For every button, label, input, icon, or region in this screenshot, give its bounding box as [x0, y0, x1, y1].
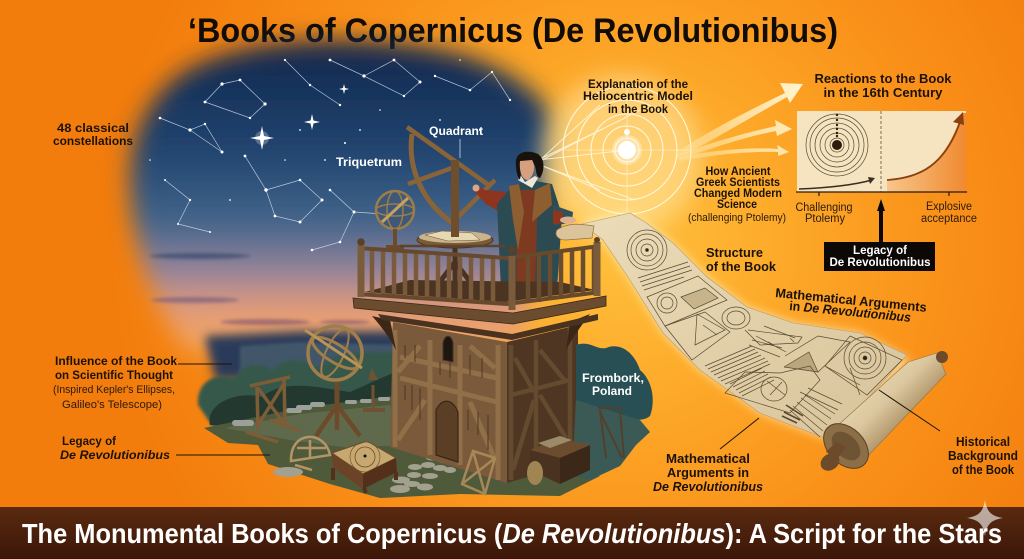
sun [618, 141, 636, 159]
lower arrow [679, 145, 789, 161]
quadrant post [451, 160, 459, 237]
ground [204, 395, 600, 498]
leaning square frame [462, 451, 495, 494]
axis [796, 192, 967, 196]
hand on instrument [472, 184, 480, 192]
tower [372, 314, 598, 483]
stars [149, 59, 511, 251]
leader line: legacy [176, 454, 270, 456]
label: historical background: Historical [956, 435, 1010, 449]
square astrolabe table [332, 441, 397, 493]
tower right timber frame [511, 328, 570, 480]
tower door [436, 401, 458, 462]
trees [576, 344, 653, 420]
balcony floor shadow [365, 280, 595, 302]
quadrant beams [407, 127, 495, 218]
middle arrow [677, 120, 792, 160]
ground right [572, 400, 650, 480]
label: Frombork [582, 371, 644, 398]
chart: reactions to the book [796, 111, 967, 196]
label: mathematical arguments on scroll top: in De Revolutionibus [789, 298, 912, 325]
stone path [273, 456, 456, 493]
tower right face [507, 325, 578, 483]
label: how ancient greek scientists: (challenging Ptolemy) [688, 212, 786, 224]
chart x-axis label: challenging Ptolemy: Challenging [796, 202, 852, 214]
dashed divider [880, 111, 882, 192]
scroll sheet [582, 213, 907, 440]
large armillary sphere [305, 326, 362, 436]
explosive acceptance area [887, 113, 966, 192]
legacy callout box: Legacy of [853, 243, 908, 257]
scroll roller cylinder [826, 353, 946, 458]
corner posts [361, 242, 597, 310]
table legs [432, 245, 478, 292]
balusters left [372, 249, 493, 302]
scroll diagrams [627, 230, 902, 437]
night sky panel [130, 41, 552, 352]
label: explanation of heliocentric model: Heliocentric Model [583, 91, 693, 103]
title: ‘Books of Copernicus (De Revolutionibus) [188, 12, 838, 50]
balcony deck [353, 296, 606, 324]
orbit diagram [806, 114, 868, 176]
hair [516, 152, 544, 180]
red sleeve [553, 210, 563, 224]
label: legacy left [60, 434, 170, 462]
fur collar [509, 183, 552, 250]
label: how ancient greek scientists: Greek Scientists [696, 177, 780, 189]
white collar [518, 176, 538, 188]
bright stars [250, 84, 349, 150]
stone wall [232, 397, 390, 426]
label: structure of the book [706, 245, 777, 274]
leader line: historical background [879, 390, 940, 431]
reaction arrows [675, 83, 803, 161]
label: Triquetrum: Triquetrum [336, 155, 402, 169]
label: influence of the book [53, 354, 177, 411]
label: explanation of heliocentric model: in the Book [608, 104, 669, 116]
label: how ancient greek scientists: Changed Modern [694, 188, 782, 200]
label: mathematical arguments on scroll top: Mathematical Arguments [775, 285, 927, 315]
glow [542, 75, 702, 235]
label: Frombork: Poland [592, 384, 632, 398]
label: how ancient greek scientists: How Ancient [706, 166, 771, 178]
balusters right [528, 247, 594, 303]
label: mathematical arguments lower [653, 452, 763, 494]
bottom banner [0, 500, 1024, 559]
label: historical background: of the Book [952, 463, 1014, 477]
tower timber frame [395, 330, 498, 480]
legacy callout box: De Revolutionibus [830, 255, 931, 269]
wooden chest [530, 436, 590, 484]
label: influence of the book: Influence of the Book [55, 354, 177, 368]
distant hills [205, 331, 400, 380]
label: reactions heading [814, 71, 952, 100]
sparkle mark [967, 500, 1003, 536]
support brackets [372, 314, 590, 350]
tower plank texture [405, 345, 488, 450]
red tunic [516, 190, 538, 290]
half-circle protractor [291, 437, 330, 470]
tree line [198, 352, 398, 430]
wooden cross frame [246, 377, 300, 442]
round table [417, 232, 493, 248]
light rays from head to heliocentric model [538, 75, 702, 235]
tower left face [390, 322, 507, 483]
label: Quadrant: Quadrant [429, 124, 483, 138]
label: historical background: Background [948, 449, 1018, 463]
rolled scroll end [556, 224, 594, 240]
chart x-axis label: explosive: Explosive [926, 201, 972, 213]
parchment scroll [580, 213, 948, 477]
label: constellations: constellations [53, 134, 133, 148]
quadrant and table [407, 127, 495, 292]
chart x-axis label: Ptolemy: Ptolemy [805, 213, 845, 225]
bracket beam [378, 314, 598, 340]
dusk clouds [150, 253, 370, 325]
tower window [443, 336, 453, 362]
early slow curve arrow [799, 180, 872, 189]
label: mathematical arguments lower: Mathematical [666, 452, 750, 466]
banner strip [0, 507, 1024, 559]
upper arrow [675, 83, 803, 158]
back rail [400, 245, 505, 247]
near arm [553, 205, 573, 226]
label: historical background [948, 435, 1018, 477]
constellations [160, 60, 510, 250]
face [520, 160, 534, 180]
far arm sleeve [473, 186, 507, 212]
label: mathematical arguments lower: Arguments in [667, 466, 749, 480]
leader line: influence [178, 363, 232, 365]
sky gradient [130, 41, 552, 352]
heliocentric orbits [563, 86, 691, 214]
legacy callout box [824, 242, 935, 271]
balcony [353, 237, 606, 324]
roller upper knob [936, 351, 948, 363]
converging rays [538, 105, 640, 200]
scroll glow [580, 213, 910, 440]
growth curve [887, 122, 960, 180]
label: mathematical arguments lower: De Revolutionibus [653, 480, 763, 494]
chart x-axis label: acceptance: acceptance [921, 213, 977, 225]
round disc [527, 461, 543, 485]
small sundial pedestal [363, 368, 385, 412]
roller end cap [815, 415, 877, 477]
leader line: mathematical arguments [720, 418, 759, 449]
label: influence of the book: on Scientific Thought [55, 368, 173, 382]
cloak [497, 180, 562, 290]
label: reactions heading: Reactions to the Book [814, 71, 952, 86]
label: structure of the book: Structure [706, 245, 763, 260]
label: structure of the book: of the Book [706, 259, 777, 274]
label: how ancient greek scientists [688, 166, 786, 224]
left landscape [198, 326, 600, 498]
pointer line [459, 139, 461, 158]
small tripod [598, 408, 624, 458]
open book on table [425, 231, 480, 241]
label: reactions heading: in the 16th Century [824, 85, 943, 100]
label: explanation of heliocentric model [583, 79, 693, 116]
sun and planets [832, 114, 842, 150]
black arrow to chart [877, 199, 885, 243]
label: 48 classical constellations: 48 classical [57, 121, 129, 135]
post finials [357, 237, 600, 254]
label: influence of the book: (Inspired Kepler's Ellipses, [53, 384, 175, 396]
label: how ancient greek scientists: Science [717, 199, 757, 211]
right trees and ground [462, 344, 653, 494]
quadrant arc [411, 134, 454, 224]
label: explanation of heliocentric model: Explanation of the [588, 79, 688, 91]
label: influence of the book: Galileo's Telescope) [62, 399, 162, 411]
label: legacy left: De Revolutionibus [60, 448, 170, 462]
Copernicus figure [472, 152, 594, 290]
label: Frombork: Frombork, [582, 371, 644, 385]
banner title: The Monumental Books of Copernicus (De Revolutionibus): A Script for the Stars [22, 518, 1002, 549]
rails [358, 246, 600, 304]
hand on scroll [560, 216, 576, 224]
small armillary on deck [376, 191, 414, 247]
roller lower knob [826, 442, 846, 458]
label: legacy left: Legacy of [62, 434, 117, 448]
chart panel [797, 111, 966, 192]
